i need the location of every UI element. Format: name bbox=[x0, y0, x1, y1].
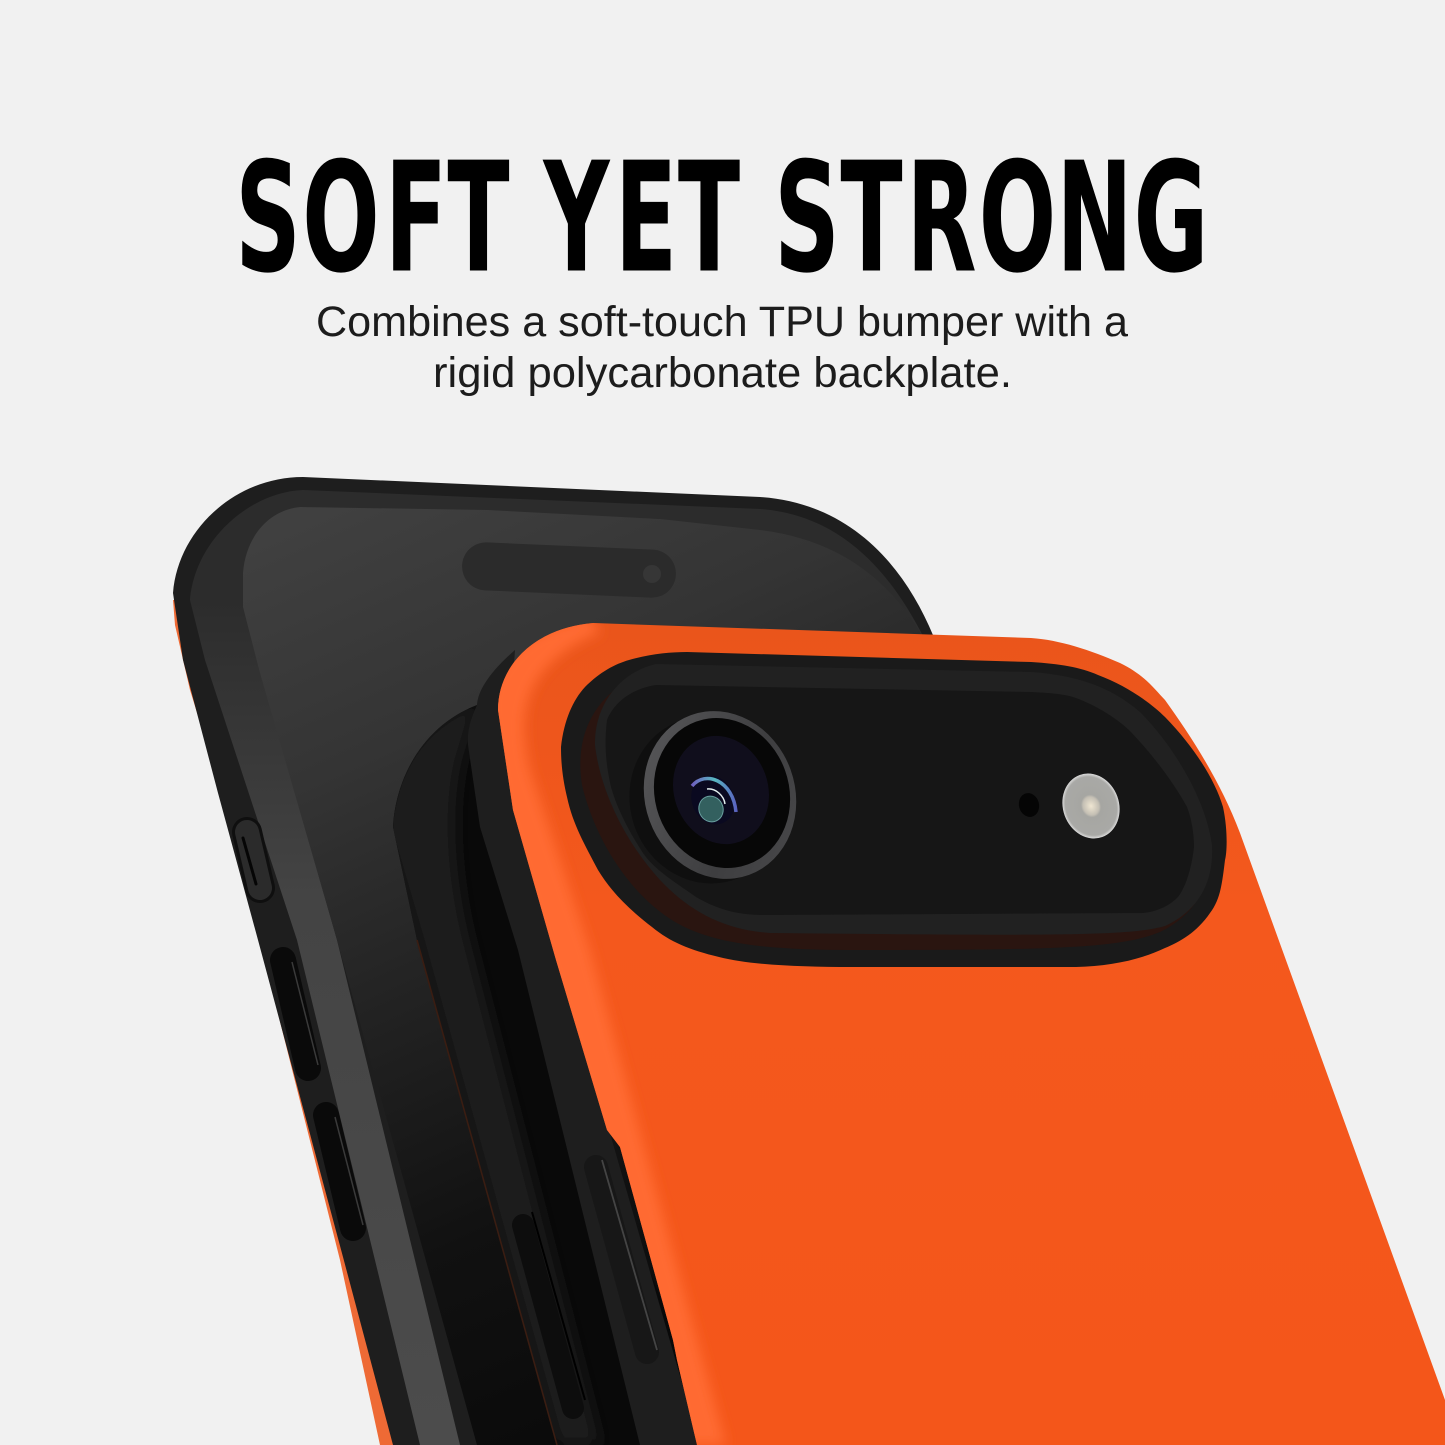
subtitle: Combines a soft-touch TPU bumper with a bbox=[316, 298, 1128, 346]
button: action bbox=[243, 832, 260, 888]
main lens bbox=[608, 689, 820, 904]
button: volume up bbox=[283, 960, 318, 1068]
dynamic island bbox=[461, 541, 677, 599]
black side bumper bbox=[468, 650, 700, 1445]
button: side lower bbox=[523, 1212, 585, 1408]
screen glass bbox=[243, 507, 925, 1445]
subtitle: rigid polycarbonate backplate. bbox=[433, 349, 1012, 397]
bumper light band bbox=[190, 490, 925, 1445]
title: SOFT YET STRONG bbox=[235, 130, 1208, 307]
camera island bbox=[561, 652, 1227, 967]
button: side upper bbox=[596, 1160, 657, 1352]
black bumper bbox=[173, 477, 935, 1445]
orange case edge bbox=[173, 600, 420, 1445]
orange left edge highlight bbox=[488, 618, 726, 1445]
button: volume down bbox=[326, 1115, 363, 1228]
flash bbox=[1053, 765, 1129, 847]
rear body lit strip bbox=[385, 700, 600, 1445]
orange back plate bbox=[498, 623, 1445, 1445]
phone case: back view in front bbox=[385, 618, 1445, 1445]
camera plate bbox=[606, 685, 1194, 915]
front camera bbox=[643, 565, 661, 583]
phone case: front view behind bbox=[173, 477, 935, 1445]
infographic canvas bbox=[173, 158, 1445, 1445]
island brown shadow band bbox=[580, 668, 1210, 950]
subtitle bbox=[316, 298, 1128, 397]
microphone bbox=[1016, 791, 1042, 819]
island outer gasket bbox=[561, 652, 1227, 967]
island inner ridge bbox=[595, 664, 1212, 935]
brown edge line bbox=[417, 940, 557, 1445]
black rear body bbox=[393, 655, 720, 1445]
